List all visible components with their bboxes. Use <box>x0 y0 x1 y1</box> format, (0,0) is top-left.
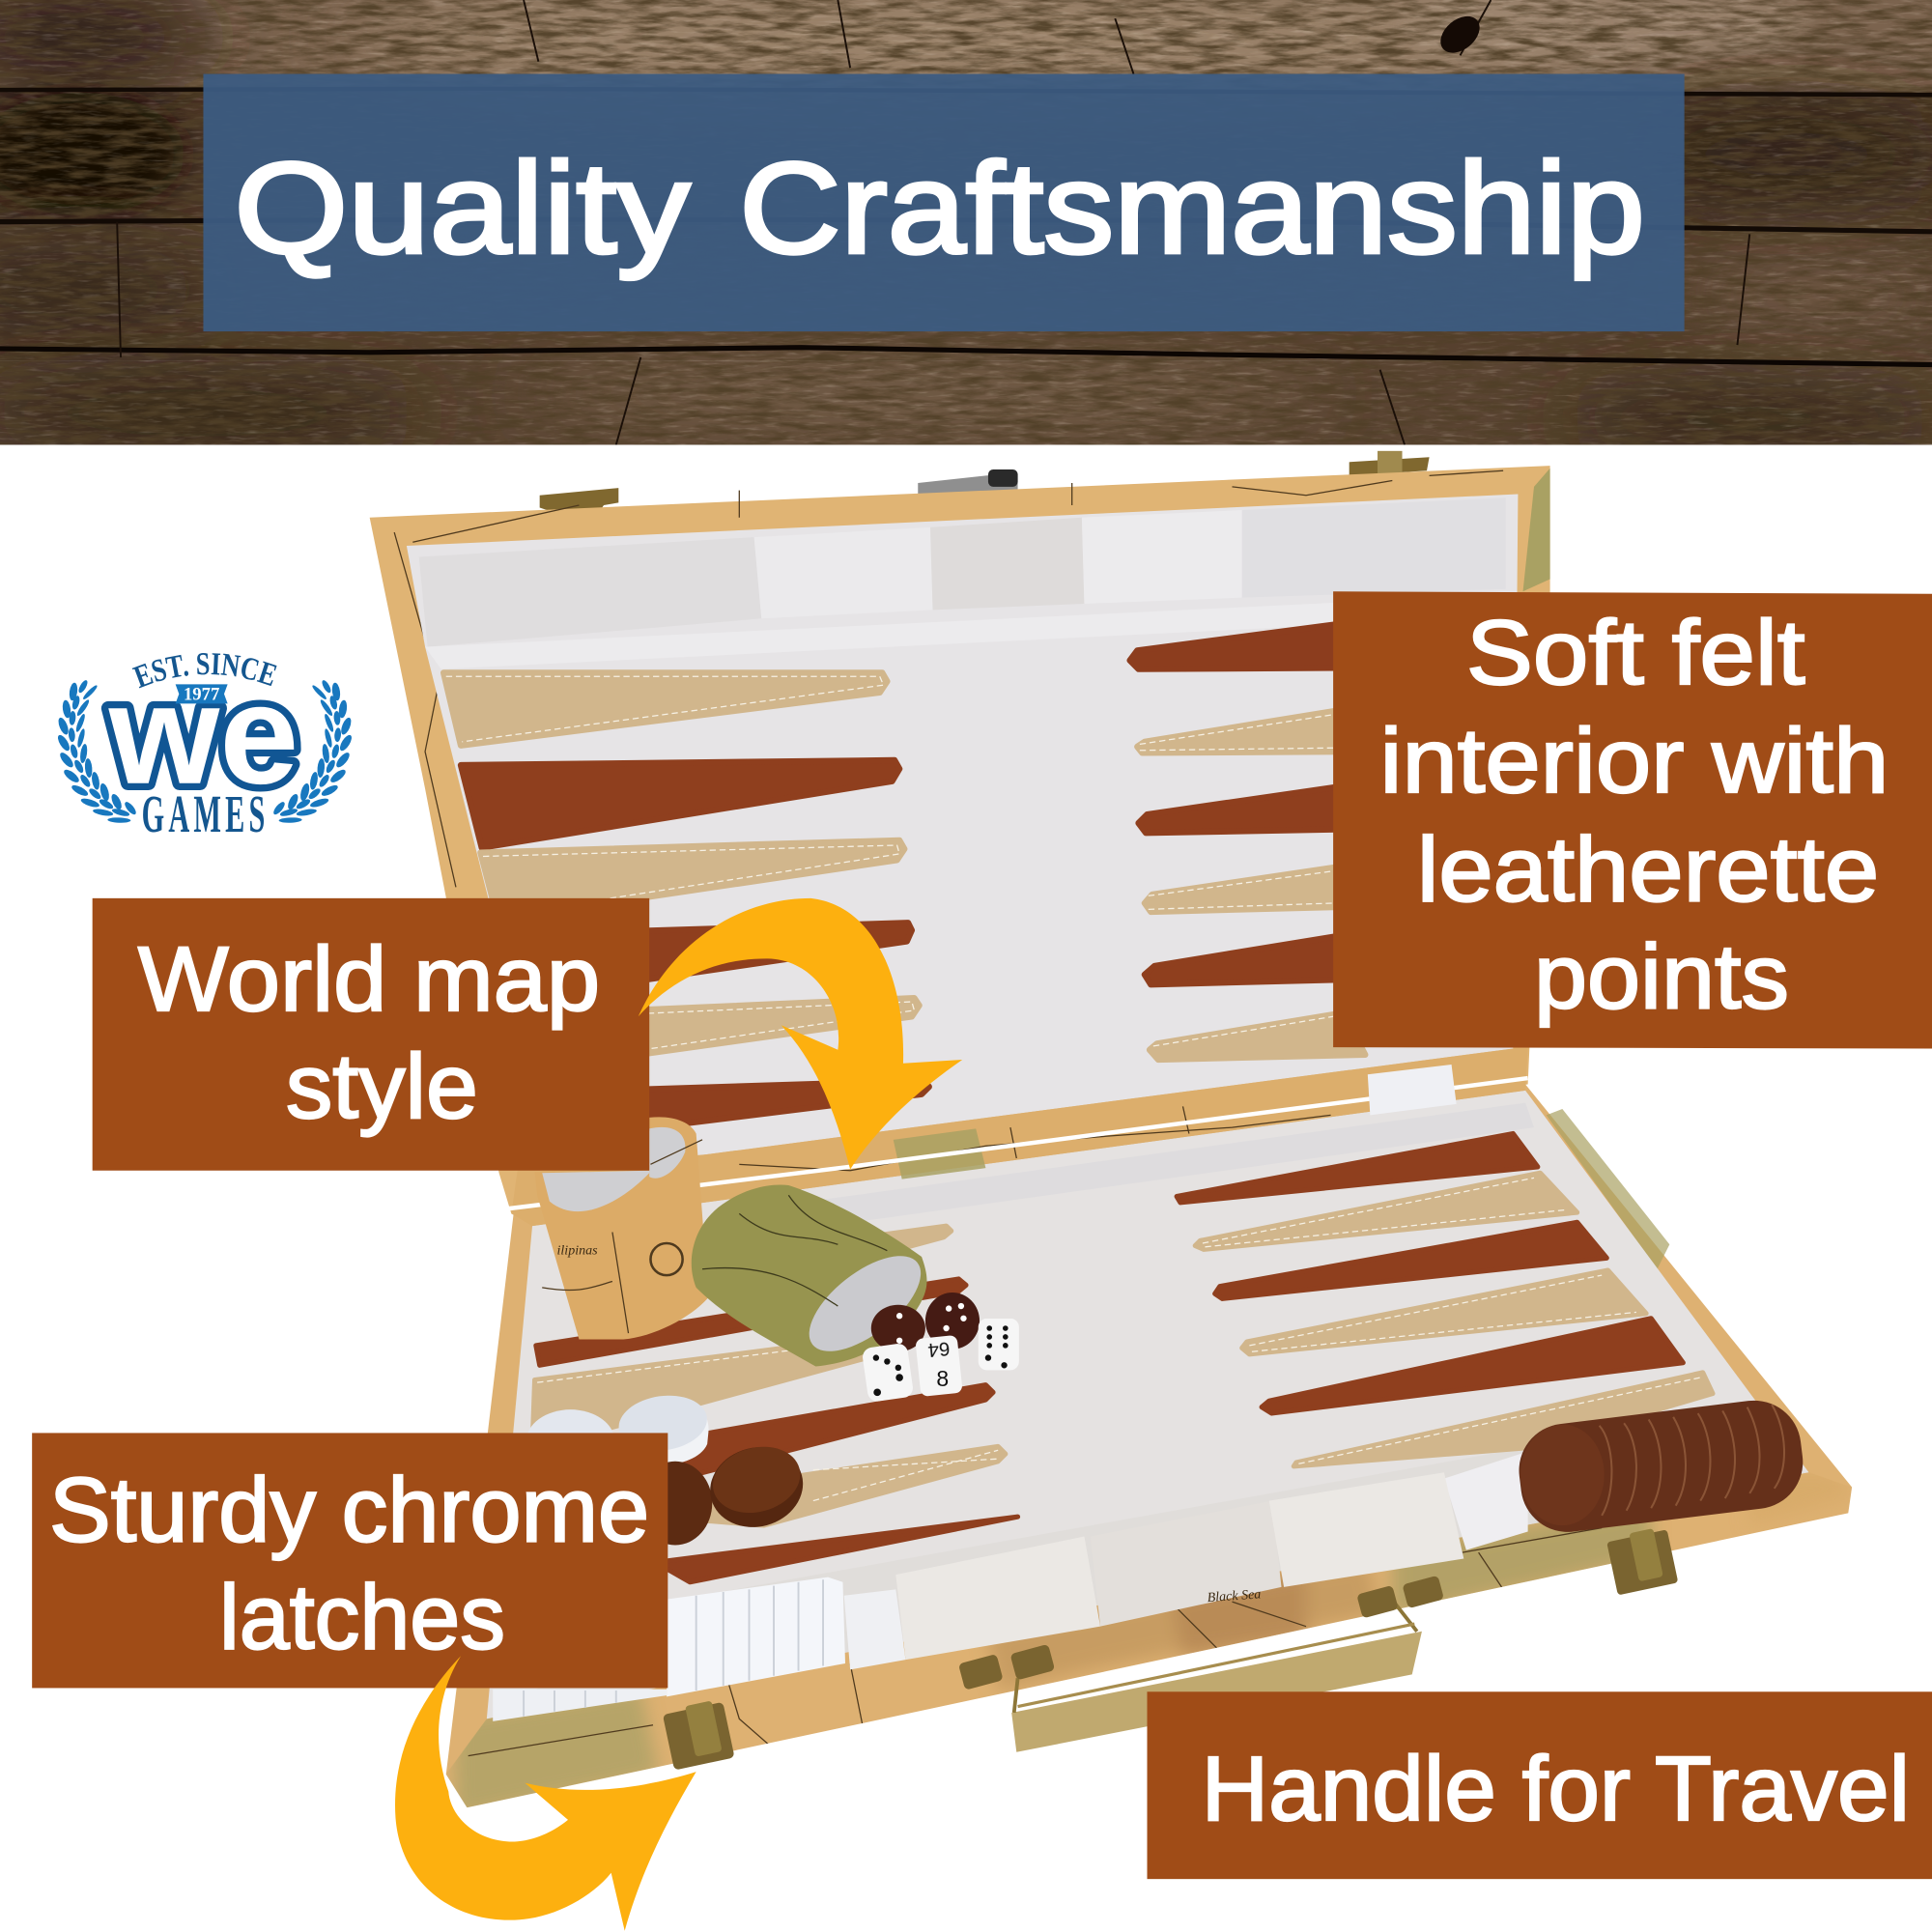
callout text: latches <box>219 1568 505 1669</box>
title background <box>203 74 1685 331</box>
callout text: leatherette <box>1417 819 1879 921</box>
callout: chrome latches <box>32 1433 668 1688</box>
callout box <box>32 1433 668 1688</box>
dice cup: green <box>692 1184 936 1369</box>
base inner wall <box>721 1103 1534 1238</box>
stitching on lid points <box>446 676 1333 1065</box>
dice cup: tan: ilipinas <box>557 1242 598 1258</box>
logo wordmark: we <box>108 656 298 814</box>
callout text: interior with <box>1380 711 1889 812</box>
callout text <box>138 929 600 1138</box>
title text <box>234 136 1645 280</box>
callout text: World map <box>138 929 600 1031</box>
title text: Craftsmanship <box>739 136 1645 280</box>
board base map frame <box>446 1084 1852 1807</box>
base tray <box>493 1449 1806 1719</box>
callout box <box>1333 591 1932 1048</box>
arrow: chrome latches <box>395 1656 696 1931</box>
backgammon case <box>370 451 1852 1817</box>
callout text: style <box>286 1037 478 1138</box>
white checkers stack <box>493 1577 845 1721</box>
logo year: 1977 <box>184 685 219 705</box>
callout: handle <box>1148 1691 1932 1879</box>
lid right points <box>1130 623 1365 1060</box>
lid tray compartments <box>419 497 1516 669</box>
callout text: Handle for Travel <box>1202 1739 1910 1840</box>
dice: 8 <box>936 1366 949 1391</box>
logo arc guide <box>139 674 277 689</box>
base left points <box>532 1226 1018 1582</box>
lid left points <box>443 672 929 1141</box>
title text: Quality <box>234 136 690 280</box>
base felt <box>487 1091 1808 1719</box>
callout text <box>49 1461 649 1669</box>
logo: WE Games <box>58 653 352 843</box>
front brass latches and hinges <box>663 1528 1678 1771</box>
logo arc text: EST. SINCE <box>131 653 276 688</box>
map label on case: Black Sea <box>1207 1586 1262 1605</box>
callout box <box>1148 1691 1932 1879</box>
loose checkers <box>526 1390 812 1545</box>
base right points <box>1177 1133 1713 1466</box>
hinge strip <box>508 1048 1528 1226</box>
lid map frame <box>370 466 1550 1213</box>
wood banner background <box>0 0 1932 453</box>
top latches <box>540 451 1430 513</box>
base right rim olive patches <box>1547 1109 1669 1269</box>
callout text <box>1380 603 1889 1028</box>
dice: 64 <box>927 1337 951 1360</box>
lid felt <box>407 494 1518 1177</box>
brown checkers stack <box>1514 1395 1808 1537</box>
callout text: points <box>1534 926 1789 1028</box>
lid map details <box>394 470 1503 887</box>
logo ribbon <box>176 684 228 703</box>
handle <box>1011 1597 1422 1752</box>
front map blotches <box>453 1472 1852 1817</box>
callout text: Soft felt <box>1466 603 1805 704</box>
title panel <box>203 74 1685 331</box>
callout box <box>93 898 649 1171</box>
lid corner olive patch <box>1523 469 1550 591</box>
callout: world map <box>93 898 649 1171</box>
logo laurel <box>56 679 354 823</box>
stitching on base points <box>537 1178 1700 1501</box>
dice cup: tan <box>535 1117 708 1339</box>
callout: soft felt <box>1333 591 1932 1048</box>
logo games: GAMES <box>142 783 270 843</box>
dice <box>862 1293 1019 1403</box>
callout text: Sturdy chrome <box>49 1461 649 1562</box>
arrow: world map <box>639 898 962 1169</box>
